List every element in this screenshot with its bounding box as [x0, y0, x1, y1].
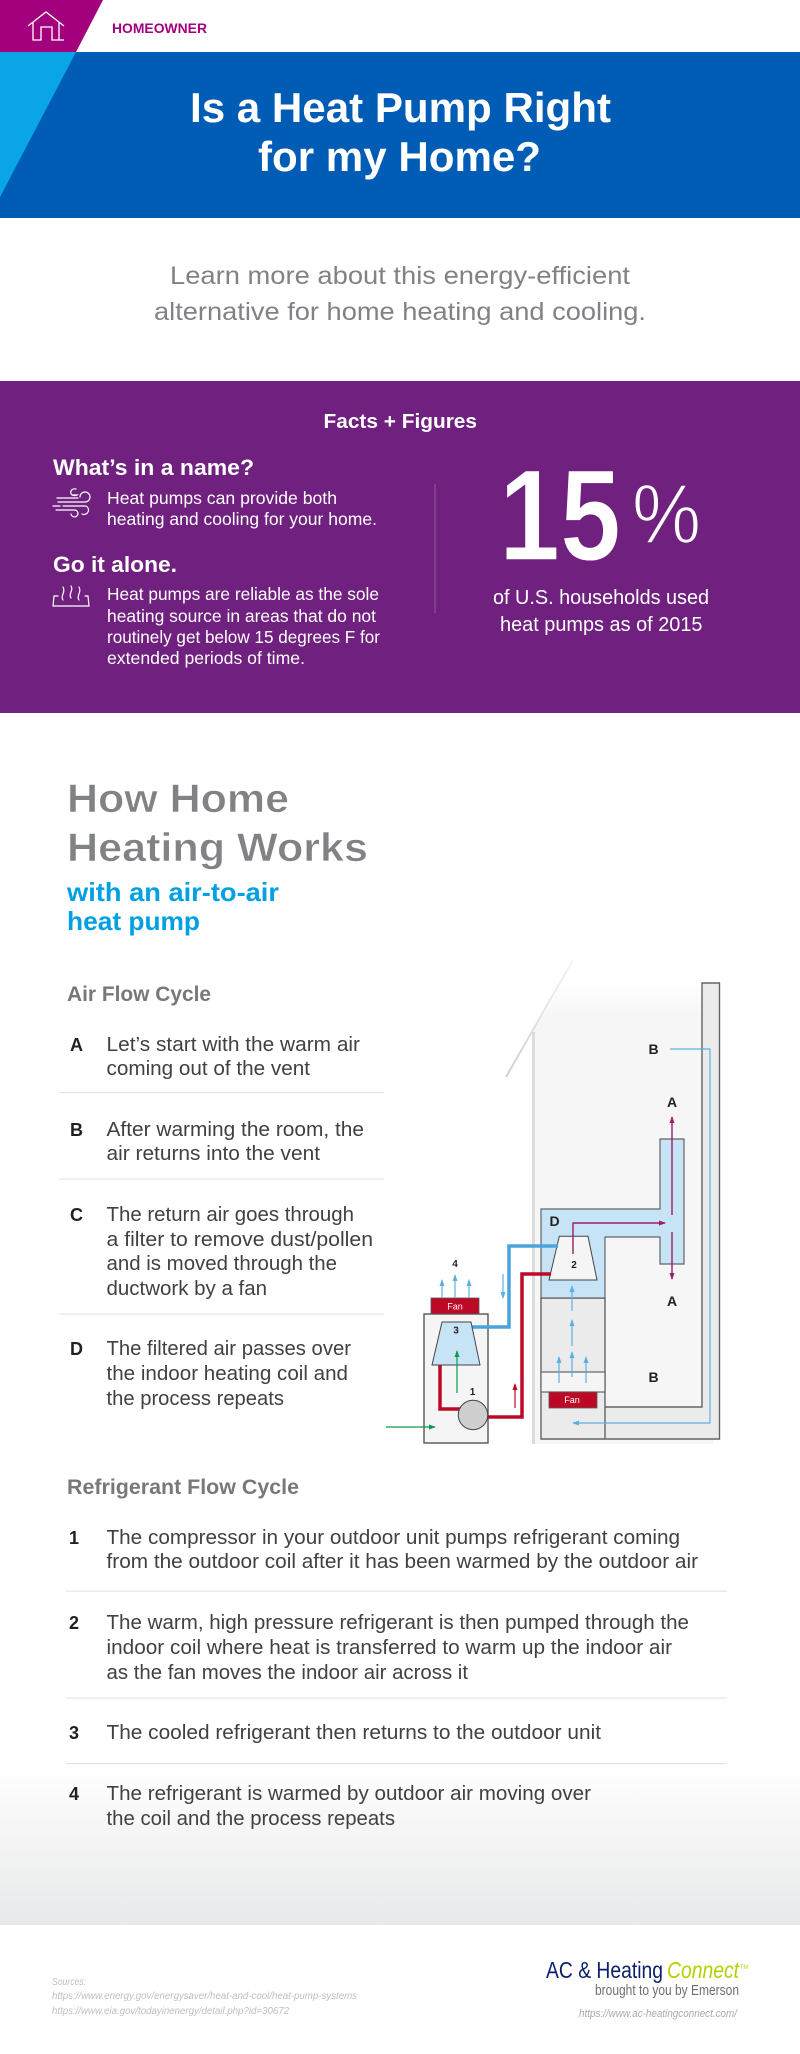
step B: B: [70, 1120, 83, 1140]
outdoor coil 3: [432, 1322, 480, 1365]
step 4: The refrigerant is warmed by outdoor air moving over: [106, 1783, 591, 1805]
heading: air flow cycle: Air Flow Cycle: [67, 983, 211, 1006]
step 1: The compressor in your outdoor unit pumps refrigerant coming: [106, 1527, 680, 1549]
title: [190, 84, 611, 180]
step A: [70, 1034, 360, 1080]
title: Is a Heat Pump Right: [190, 84, 611, 131]
logo: AC and Heating Connect: brought to you by Emerson: [595, 1982, 739, 1999]
label D: D: [549, 1213, 560, 1229]
heading: how home heating works: How Home: [67, 777, 289, 821]
step 4: [69, 1783, 591, 1830]
indoor coil 2: [549, 1236, 597, 1280]
website link: https://www.ac-heatingconnect.com/: [579, 2008, 738, 2020]
heading: facts + figures: Facts + Figures: [324, 411, 477, 433]
compressor 1: 1: [470, 1387, 476, 1398]
step B: After warming the room, the: [106, 1119, 364, 1141]
subtitle: alternative for home heating and cooling.: [154, 298, 646, 326]
logo: AC and Heating Connect: AC & Heating: [546, 1957, 663, 1983]
stat: 15 percent: %: [632, 467, 701, 561]
outdoor coil 3: 3: [453, 1326, 459, 1336]
step D: the indoor heating coil and: [106, 1363, 348, 1385]
sources: https://www.energy.gov/energysaver/heat-and-cool/heat-pump-systems: [52, 1991, 357, 2002]
arrows: air through handler: [559, 1286, 586, 1383]
header tab: homeowner: [0, 0, 207, 52]
indoor fan: Fan: [564, 1395, 580, 1405]
section background fade: [0, 1763, 800, 1925]
arrows: warm air: [573, 1117, 672, 1279]
step A: A: [70, 1035, 83, 1055]
diagram: heat pump air and refrigerant flow: [386, 960, 720, 1444]
labels: A and B: B: [648, 1369, 659, 1385]
step 2: The warm, high pressure refrigerant is then pumped through the: [106, 1612, 689, 1634]
sources: [52, 1977, 357, 2017]
refrigerant pipe: cool: [472, 1246, 558, 1327]
subheading: with an air-to-air heat pump: [66, 877, 279, 936]
subtitle: Learn more about this energy-efficient: [170, 262, 630, 290]
heading: how home heating works: [67, 777, 368, 870]
subheading: with an air-to-air heat pump: heat pump: [67, 906, 200, 936]
icon: heat rising from surface: [53, 586, 89, 606]
logo: AC and Heating Connect: TM: [740, 1965, 748, 1971]
text: go it alone: Heat pumps are reliable as the sole: [107, 584, 379, 604]
refrigerant pipe: warm: [440, 1274, 551, 1417]
step C: The return air goes through: [106, 1204, 354, 1226]
heading: go it alone: Go it alone.: [53, 552, 177, 577]
stat caption: [493, 587, 709, 636]
text: go it alone: extended periods of time.: [107, 648, 305, 668]
panel: facts and figures: [0, 381, 800, 713]
labels: A and B: A: [667, 1094, 677, 1110]
text: what's in a name: [107, 488, 377, 529]
arrows: green outdoor air: [386, 1351, 457, 1427]
stat: 15 percent: 15: [499, 442, 621, 588]
ductwork: return duct: [541, 983, 720, 1439]
step D: the process repeats: [106, 1388, 284, 1410]
logo: AC and Heating Connect: Connect: [667, 1957, 740, 1983]
step 2: [69, 1612, 689, 1684]
title banner: [0, 52, 800, 218]
step D: [70, 1338, 351, 1410]
title: for my Home?: [258, 133, 541, 180]
step C: ductwork by a fan: [106, 1278, 267, 1300]
outdoor unit: [424, 1314, 488, 1443]
arrow: warm refrigerant direction: [514, 1384, 516, 1408]
step D: D: [70, 1339, 83, 1359]
labels: A and B: A: [667, 1293, 677, 1309]
outdoor fan: Fan: [447, 1302, 463, 1312]
step 3: The cooled refrigerant then returns to the outdoor unit: [106, 1722, 601, 1744]
sources: Sources:: [52, 1977, 86, 1988]
label 4: 4: [452, 1259, 458, 1270]
step 3: 3: [69, 1723, 79, 1743]
outdoor fan: [431, 1298, 479, 1314]
step C: and is moved through the: [106, 1253, 337, 1275]
step 2: indoor coil where heat is transferred to warm up the indoor air: [106, 1637, 672, 1659]
step A: Let’s start with the warm air: [106, 1034, 360, 1056]
text: go it alone: [107, 584, 380, 668]
house outline: [506, 960, 713, 1444]
labels: A and B: [648, 1041, 677, 1385]
step B: air returns into the vent: [106, 1143, 320, 1165]
step 2: 2: [69, 1613, 79, 1633]
step 1: 1: [69, 1528, 79, 1548]
list: refrigerant flow cycle: [66, 1527, 727, 1830]
ductwork: supply duct: [541, 1139, 684, 1298]
subtitle: [154, 262, 646, 326]
text: what's in a name: Heat pumps can provide both: [107, 488, 337, 508]
subheading: with an air-to-air heat pump: with an air-to-air: [66, 877, 279, 907]
text: what's in a name: heating and cooling for your home.: [107, 509, 377, 529]
icon: wind: [53, 489, 90, 517]
stat caption: of U.S. households used: [493, 587, 709, 609]
step C: a filter to remove dust/pollen: [106, 1229, 373, 1251]
arrow: return air: [573, 1049, 710, 1423]
labels: A and B: B: [648, 1041, 659, 1057]
sources: https://www.eia.gov/todayinenergy/detail.php?id=30672: [52, 2006, 289, 2017]
step B: [70, 1119, 364, 1165]
arrow: cool refrigerant direction: [502, 1274, 504, 1298]
step 1: from the outdoor coil after it has been warmed by the outdoor air: [106, 1551, 698, 1573]
step 4: the coil and the process repeats: [106, 1808, 395, 1830]
indoor coil 2: 2: [571, 1260, 577, 1271]
arrows: outdoor air leaving fan: [442, 1275, 469, 1298]
heading: refrigerant flow cycle: Refrigerant Flow Cycle: [67, 1476, 299, 1499]
stat caption: heat pumps as of 2015: [500, 614, 702, 636]
heading: what's in a name: What’s in a name?: [53, 455, 254, 480]
list: air flow cycle: [59, 1034, 384, 1410]
compressor 1: [458, 1387, 488, 1430]
step 1: [69, 1527, 698, 1573]
heading: how home heating works: Heating Works: [67, 826, 368, 870]
step C: C: [70, 1205, 83, 1225]
step 2: as the fan moves the indoor air across it: [106, 1662, 468, 1684]
icon: house: [28, 12, 64, 40]
fan housing: [541, 1372, 605, 1392]
indoor fan: [549, 1392, 597, 1408]
text: go it alone: routinely get below 15 degrees F for: [107, 627, 380, 647]
text: go it alone: heating source in areas that do not: [107, 606, 376, 626]
step 4: 4: [69, 1784, 79, 1804]
step A: coming out of the vent: [106, 1058, 310, 1080]
label: homeowner: HOMEOWNER: [112, 21, 207, 36]
step C: [70, 1204, 373, 1300]
logo: AC and Heating Connect: [546, 1957, 748, 1999]
step D: The filtered air passes over: [106, 1338, 351, 1360]
